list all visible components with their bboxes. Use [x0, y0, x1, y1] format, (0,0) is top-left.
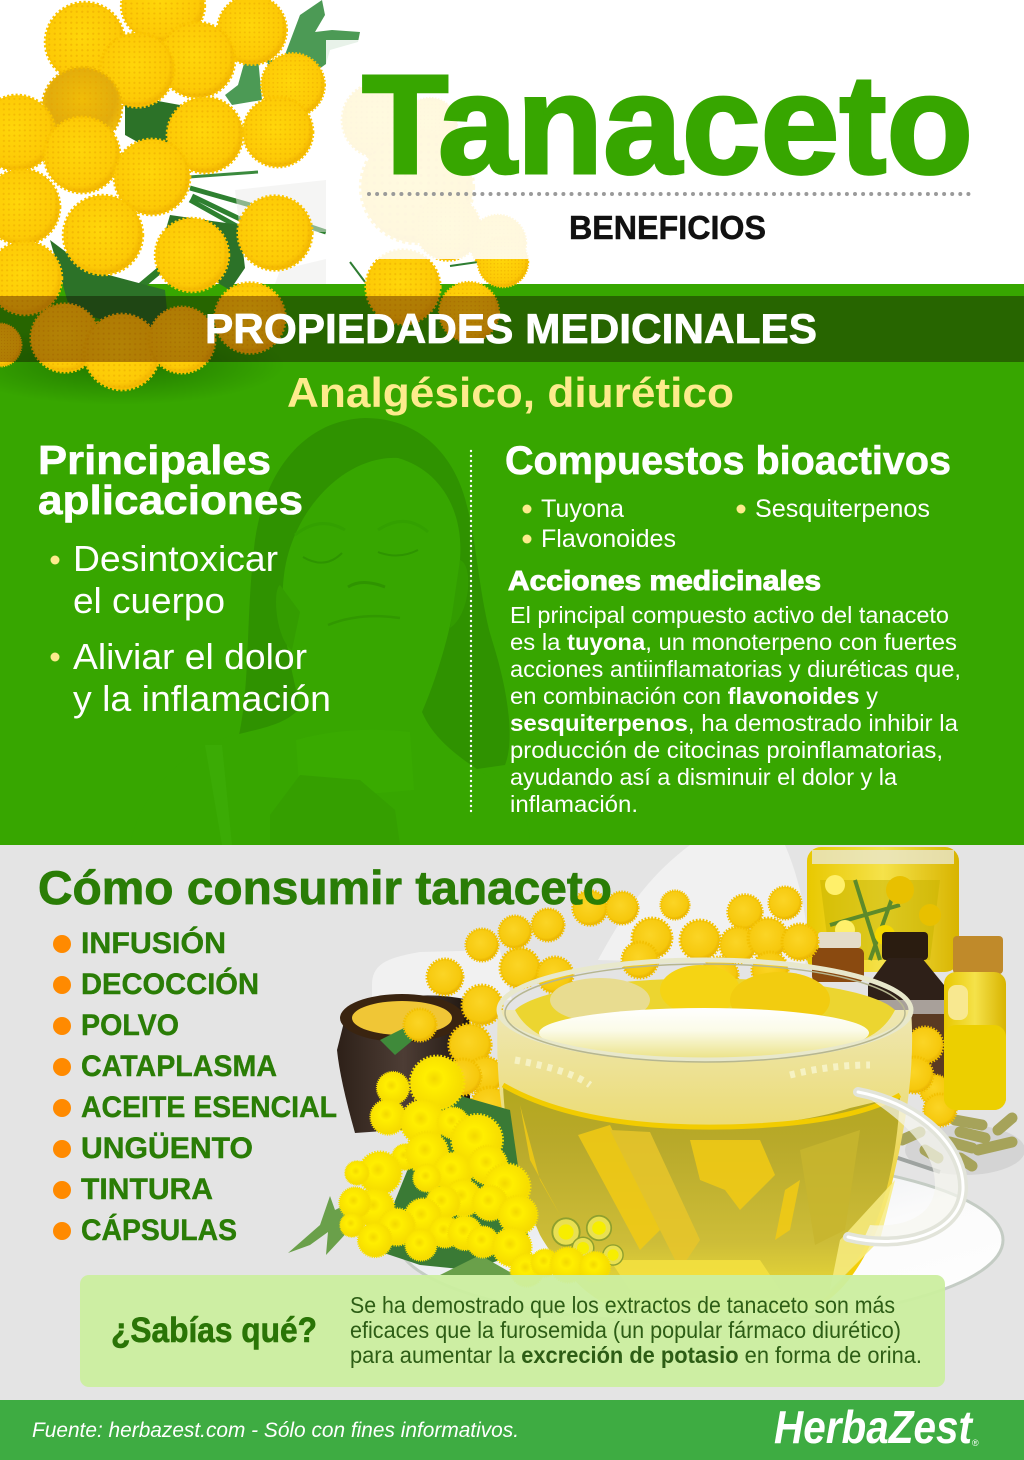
- golden tansy flowers: [404, 887, 956, 1127]
- list: compuestos: [522, 495, 930, 553]
- tea reflections: [520, 1105, 895, 1290]
- heading: cómo consumir tanaceto: Cómo consumir tanaceto: [38, 861, 612, 914]
- cup handle: [848, 1092, 963, 1245]
- text block: acciones medicinales: El principal compuesto activo del tanaceto: [510, 602, 949, 628]
- band: propiedades medicinales: [0, 296, 1024, 362]
- text block: acciones medicinales: acciones antiinflamatorias y diuréticas que,: [510, 656, 961, 682]
- oil bottle with flowers: [807, 847, 959, 972]
- list: compuestos: Flavonoides: [541, 525, 676, 553]
- small amber bottle: [812, 932, 864, 982]
- lemon yellow tansy cluster: [288, 1056, 623, 1287]
- text block: acciones medicinales: ayudando así a disminuir el dolor y la: [510, 764, 897, 790]
- flowers under the title: [342, 82, 418, 158]
- dark bottle: [868, 932, 944, 1086]
- callout text: para aumentar la excreción de potasio en forma de orina.: [350, 1342, 922, 1368]
- list: aplicaciones: y la inflamación: [73, 678, 331, 719]
- subheading: analgésico, diurético: Analgésico, diurético: [287, 369, 734, 416]
- text block: acciones medicinales: sesquiterpenos , ha demostrado inhibir la: [510, 710, 958, 736]
- subtitle: BENEFICIOS: [569, 209, 766, 246]
- glass cup bowl: [497, 1010, 912, 1310]
- callout heading: ¿Sabías qué?: [111, 1311, 317, 1350]
- footer source: Fuente: herbazest.com - Sólo con fines informativos.: [32, 1419, 519, 1442]
- title: Tanaceto: [362, 45, 973, 203]
- list: aplicaciones: [50, 538, 331, 719]
- panel: green medicinal section: [0, 284, 1024, 845]
- list: formas de consumo: TINTURA: [81, 1173, 213, 1206]
- callout: ¿sabías qué?: [80, 1275, 945, 1387]
- heading: principales aplicaciones: Principales: [38, 437, 271, 483]
- callout text: eficaces que la furosemida (un popular fármaco diurético): [350, 1317, 901, 1343]
- text block: acciones medicinales: [510, 602, 961, 817]
- list: compuestos: Tuyona: [541, 495, 624, 523]
- green foliage: [375, 1090, 530, 1270]
- panel: translucent title backing: [326, 40, 1024, 259]
- ointment jar: [337, 994, 470, 1133]
- divider: dotted column rule: [470, 451, 472, 812]
- heading: propiedades medicinales: PROPIEDADES MEDICINALES: [205, 305, 817, 352]
- list: formas de consumo: INFUSIÓN: [81, 926, 226, 960]
- capsules: [902, 1110, 1012, 1166]
- text block: acciones medicinales: en combinación con flavonoides y: [510, 683, 879, 709]
- list: formas de consumo: DECOCCIÓN: [81, 967, 259, 1001]
- small corked jar: [944, 936, 1006, 1110]
- list: formas de consumo: CATAPLASMA: [81, 1050, 277, 1083]
- text block: acciones medicinales: producción de citocinas proinflamatorias,: [510, 737, 943, 763]
- footer bar: [0, 1400, 1024, 1460]
- heading: acciones medicinales: Acciones medicinales: [508, 565, 821, 596]
- text block: acciones medicinales: es la tuyona, un monoterpeno con fuertes: [510, 629, 957, 655]
- leaves and stems: [0, 0, 478, 405]
- logo: herbazest: ®: [972, 1438, 979, 1448]
- illustration: herbal tea still life: [288, 845, 1024, 1323]
- tea line: [503, 1085, 900, 1127]
- capsule shadow: [905, 1125, 1024, 1175]
- text block: acciones medicinales: inflamación.: [510, 791, 638, 817]
- logo: herbazest: HerbaZest: [774, 1401, 973, 1453]
- list: formas de consumo: ACEITE ESENCIAL: [81, 1091, 337, 1124]
- white cloth: [372, 845, 807, 1005]
- title divider: [369, 192, 972, 196]
- heading: principales aplicaciones: [38, 437, 303, 523]
- list: formas de consumo: POLVO: [81, 1009, 179, 1042]
- list: formas de consumo: UNGÜENTO: [81, 1132, 253, 1165]
- list: formas de consumo: [53, 926, 337, 1247]
- heading: compuestos bioactivos: Compuestos bioactivos: [505, 439, 951, 483]
- illustration: tansy flower bunch: [0, 0, 528, 405]
- panel: cómo consumir: [0, 845, 1024, 1400]
- list: aplicaciones: Aliviar el dolor: [73, 636, 307, 677]
- list: compuestos: Sesquiterpenos: [755, 495, 930, 523]
- list: aplicaciones: Desintoxicar: [73, 538, 278, 579]
- glass rim, interior flowers and foam: [499, 960, 911, 1085]
- callout text: [350, 1292, 922, 1368]
- list: aplicaciones: el cuerpo: [73, 580, 225, 621]
- heading: principales aplicaciones: aplicaciones: [38, 477, 303, 523]
- background: white header: [0, 0, 1024, 290]
- callout text: Se ha demostrado que los extractos de tanaceto son más: [350, 1292, 895, 1318]
- list: formas de consumo: CÁPSULAS: [81, 1213, 237, 1247]
- band: grey below the still life: [0, 1387, 1024, 1400]
- tea: [503, 1085, 900, 1310]
- image: woman silhouette: [130, 418, 530, 845]
- saucer: [397, 1157, 1003, 1323]
